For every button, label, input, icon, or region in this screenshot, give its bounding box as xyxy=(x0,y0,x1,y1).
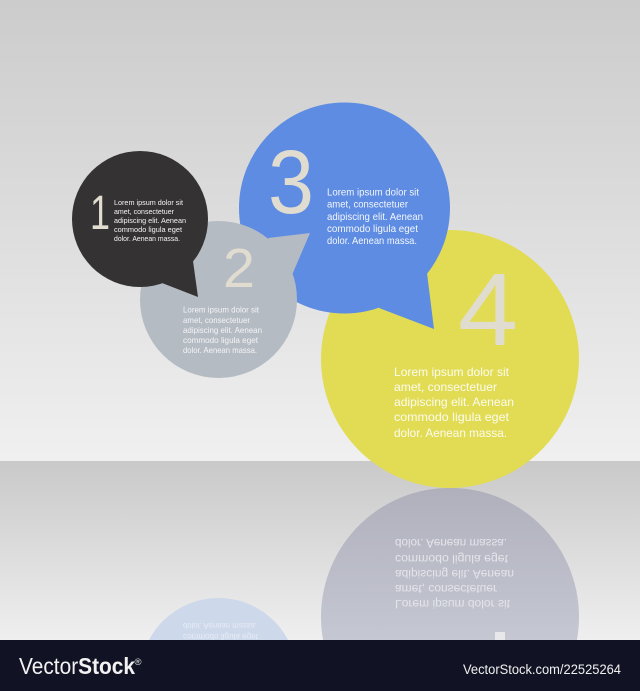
reflection of bubble 4: adipiscing elit. Aenean xyxy=(395,567,514,581)
text block 1 xyxy=(114,198,186,243)
registered mark: ® xyxy=(134,657,142,668)
reflection of bubble 4: Lorem ipsum dolor sit xyxy=(395,597,511,611)
text block 1: dolor. Aenean massa. xyxy=(114,234,180,243)
text block 2: amet, consectetuer xyxy=(183,315,250,325)
text block 1: adipiscing elit. Aenean xyxy=(114,216,186,225)
text block 4: Lorem ipsum dolor sit xyxy=(394,365,510,379)
text block 4: commodo ligula eget xyxy=(394,410,510,424)
footer image id: VectorStock.com/22525264 xyxy=(463,662,621,677)
floor xyxy=(0,461,640,640)
text block 2 xyxy=(183,305,262,355)
numeral 3: 3 xyxy=(268,133,314,233)
reflection of bubble 2 xyxy=(149,598,288,642)
bubble 2: grey xyxy=(140,221,310,378)
reflection of bubble 2: commodo ligula eget xyxy=(183,632,259,642)
text block 2: dolor. Aenean massa. xyxy=(183,345,257,355)
text block 3: adipiscing elit. Aenean xyxy=(327,211,423,223)
numeral 4: 4 xyxy=(458,252,518,367)
text block 1: commodo ligula eget xyxy=(114,225,183,234)
footer logo: VectorStock xyxy=(19,653,136,679)
bubble 4: yellow xyxy=(321,230,579,488)
text block 3: Lorem ipsum dolor sit xyxy=(327,186,419,198)
bubble 1: dark xyxy=(72,151,208,297)
reflection of bubble 4: amet, consectetuer xyxy=(395,582,497,596)
numeral 1: 1 xyxy=(90,187,110,240)
bubble 3: blue xyxy=(239,102,450,329)
text block 1: Lorem ipsum dolor sit xyxy=(114,198,184,207)
text block 4: amet, consectetuer xyxy=(394,380,497,394)
text block 4: dolor. Aenean massa. xyxy=(394,426,507,440)
reflection of bubble 4 xyxy=(321,488,579,640)
footer bar xyxy=(0,640,640,691)
text block 3: dolor. Aenean massa. xyxy=(327,235,417,247)
reflection of bubble 4: commodo ligula eget xyxy=(395,552,509,566)
text block 2: Lorem ipsum dolor sit xyxy=(183,305,260,315)
numeral 2: 2 xyxy=(223,237,255,299)
text block 4: adipiscing elit. Aenean xyxy=(394,395,514,409)
text block 1: amet, consectetuer xyxy=(114,207,174,216)
reflection of bubble 2: dolor. Aenean massa. xyxy=(183,621,257,631)
text block 3 xyxy=(327,186,423,247)
reflection of bubble 4: dolor. Aenean massa. xyxy=(395,536,507,550)
text block 2: commodo ligula eget xyxy=(183,335,259,345)
text block 3: commodo ligula eget xyxy=(327,223,418,235)
text block 4 xyxy=(394,365,514,440)
background wall xyxy=(0,0,640,461)
text block 2: adipiscing elit. Aenean xyxy=(183,325,262,335)
text block 3: amet, consectetuer xyxy=(327,198,408,210)
